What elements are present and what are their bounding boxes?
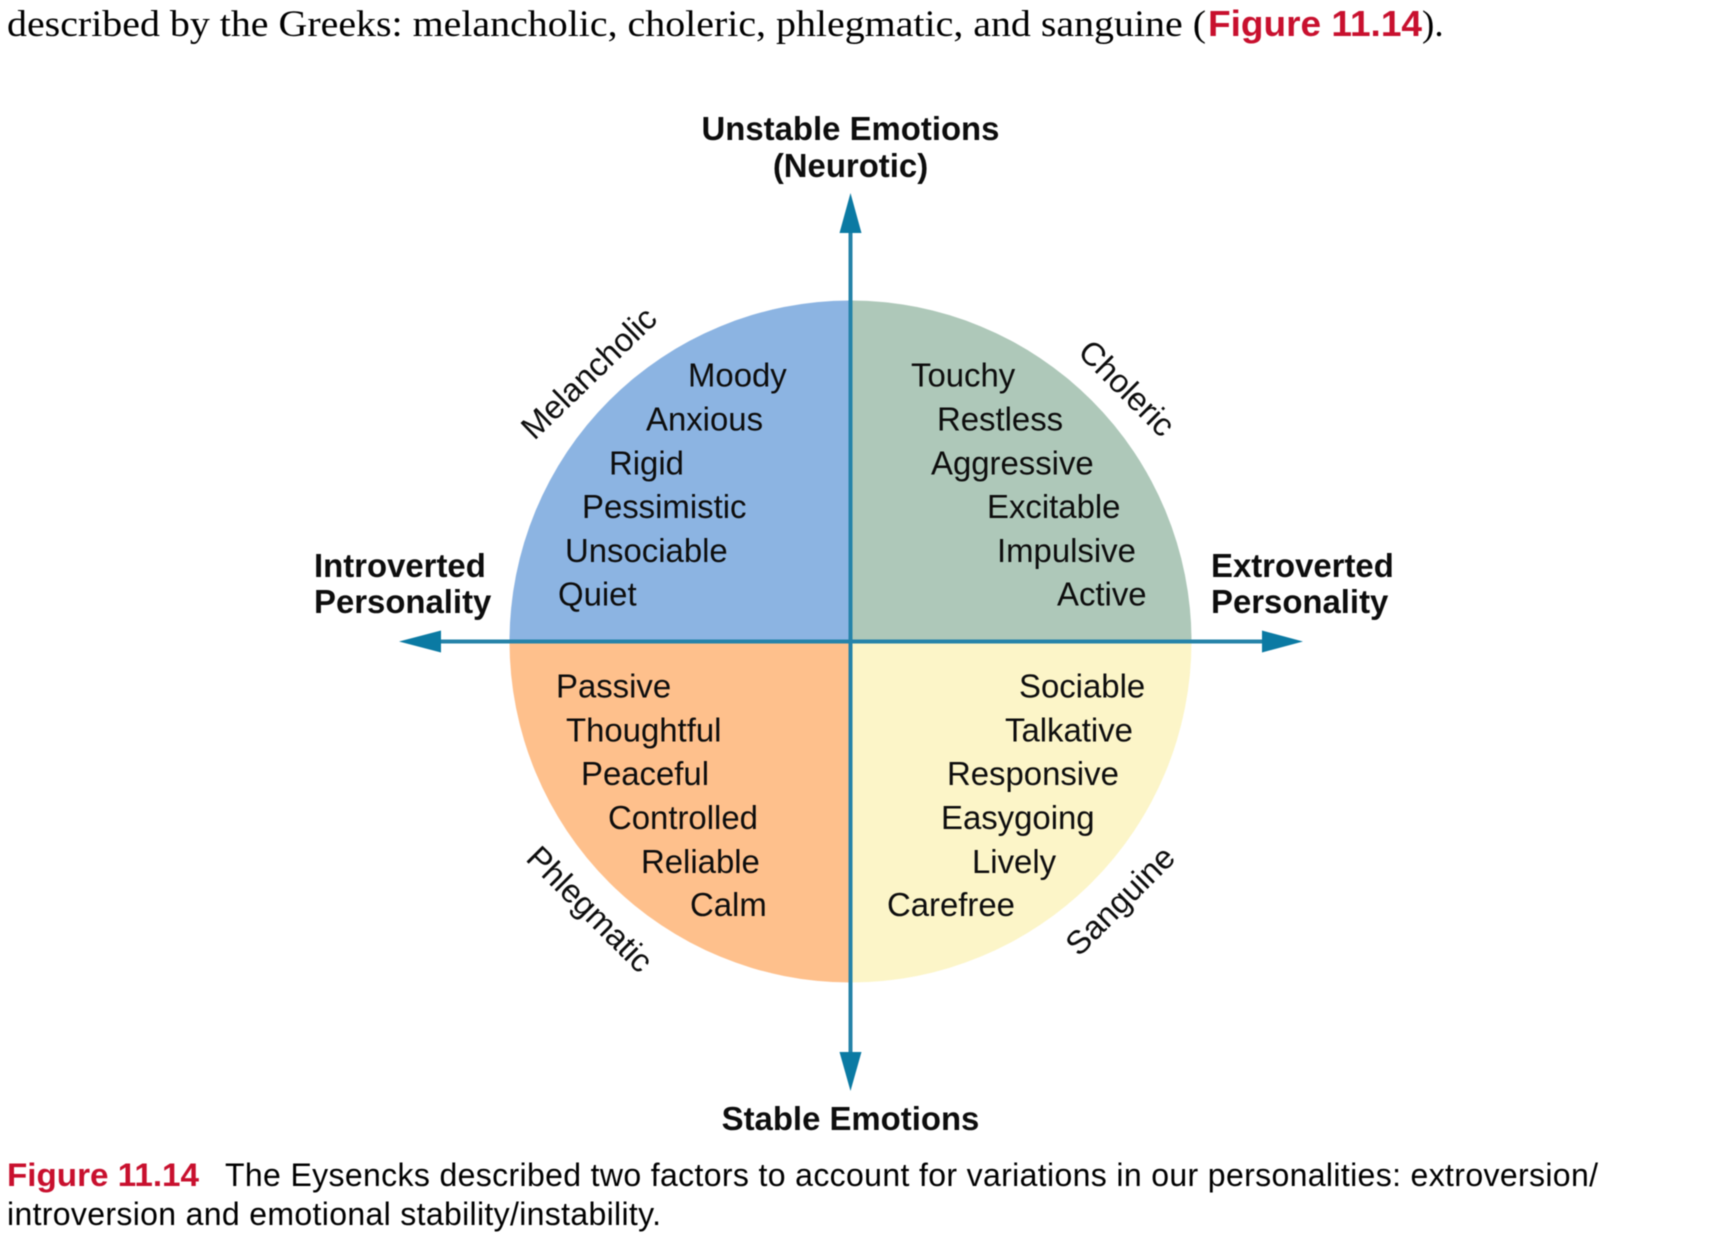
quadrant: choleric <box>850 300 1192 642</box>
axis label: extroverted personality: Extroverted <box>1211 547 1394 584</box>
traits: choleric: Active <box>1057 576 1147 612</box>
traits: melancholic: Pessimistic <box>582 488 746 525</box>
traits: melancholic: Unsociable <box>565 532 728 569</box>
traits: choleric: Impulsive <box>997 532 1136 569</box>
traits: choleric: Touchy <box>911 356 1016 394</box>
traits: choleric: Aggressive <box>931 444 1094 482</box>
figure caption: introversion and emotional stability/instability. <box>7 1196 661 1232</box>
traits: choleric: Excitable <box>987 488 1120 525</box>
figure caption <box>7 1157 1598 1232</box>
type label: choleric: Choleric <box>1072 332 1183 443</box>
traits: choleric: Restless <box>937 400 1063 438</box>
traits: sanguine: Carefree <box>887 886 1015 923</box>
axis label: unstable emotions: (Neurotic) <box>773 147 928 184</box>
traits: phlegmatic: Controlled <box>608 799 758 836</box>
traits: sanguine: Talkative <box>1005 712 1133 748</box>
type label: phlegmatic: Phlegmatic <box>520 838 661 979</box>
traits: phlegmatic: Peaceful <box>581 755 709 792</box>
traits: sanguine: Sociable <box>1019 668 1145 704</box>
figure caption: The Eysencks described two factors to account for variations in our personalities: extroversion/ <box>225 1157 1598 1193</box>
traits: sanguine: Responsive <box>947 755 1119 792</box>
traits: phlegmatic: Passive <box>556 668 671 704</box>
traits: melancholic: Anxious <box>646 400 763 438</box>
traits: melancholic: Rigid <box>609 444 684 482</box>
traits: sanguine: Easygoing <box>941 799 1095 836</box>
vertical axis arrow <box>840 193 862 1091</box>
intro sentence: Figure 11.14 <box>1208 3 1422 44</box>
intro sentence: ). <box>1422 4 1444 45</box>
type label: melancholic: Melancholic <box>513 299 664 446</box>
quadrant: phlegmatic <box>510 642 850 982</box>
traits: phlegmatic: Reliable <box>641 843 760 880</box>
figure caption: Figure 11.14 <box>7 1157 199 1193</box>
traits: phlegmatic: Thoughtful <box>566 712 721 748</box>
traits: melancholic: Moody <box>688 356 787 394</box>
intro sentence: described by the Greeks: melancholic, choleric, phlegmatic, and sanguine ( <box>7 4 1206 45</box>
traits: melancholic: Quiet <box>558 576 637 612</box>
quadrant: melancholic <box>510 300 850 642</box>
axis label: extroverted personality: Personality <box>1211 583 1389 620</box>
quadrant: sanguine <box>850 642 1192 982</box>
type label: sanguine: Sanguine <box>1058 838 1182 962</box>
traits: sanguine: Lively <box>972 843 1057 880</box>
axis label: introverted personality: Personality <box>314 583 492 620</box>
axis label: stable emotions: Stable Emotions <box>722 1100 979 1137</box>
axis label: introverted personality: Introverted <box>314 547 486 584</box>
traits: phlegmatic: Calm <box>690 886 767 923</box>
axis label: unstable emotions: Unstable Emotions <box>702 110 999 147</box>
horizontal axis arrow <box>399 630 1303 652</box>
